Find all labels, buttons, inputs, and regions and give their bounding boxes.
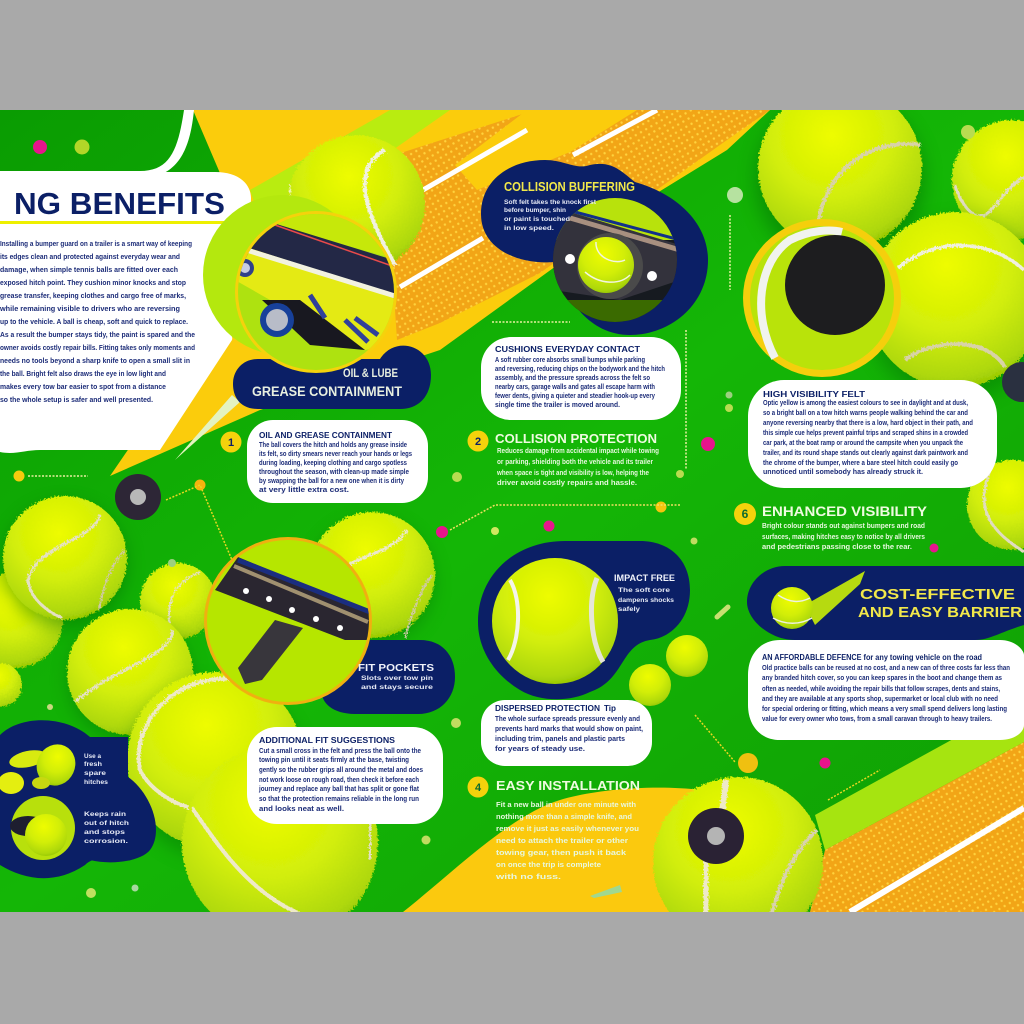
captions: Keeps rain (84, 811, 126, 818)
icon: badge 4: 4 (475, 782, 482, 794)
panel: grease text card: by swapping the ball for a new one when it is dirty (259, 476, 405, 485)
label pill (233, 346, 431, 409)
panel: grease text card (247, 420, 428, 503)
caption (618, 587, 674, 613)
heading: EASY INSTALLATION (496, 778, 640, 793)
panel: collision text card: A soft rubber core absorbs small bumps while parking (495, 355, 645, 364)
panel: visibility text card: unnoticed until somebody has already struck it. (763, 467, 923, 476)
heading: GREASE CONTAINMENT (252, 384, 403, 399)
panel: installation text card: ADDITIONAL FIT SUGGESTIONS (259, 736, 396, 745)
court graphics: bottom right band (810, 726, 1024, 912)
intro text: needs no tools beyond a sharp knife to open a small slit in (0, 356, 190, 365)
panel: visibility text card: this simple cue helps prevent painful trips and scraped shins in a crowded (763, 428, 968, 437)
panel: collision text card: nearby cars, garage walls and gates all escape harm with (495, 382, 655, 391)
captions: fresh (84, 761, 102, 768)
panel: installation text card (247, 727, 443, 824)
captions: Use a (84, 753, 101, 760)
tennis balls: top right cluster (755, 86, 1024, 552)
section: enhanced visibility (734, 503, 928, 551)
panel: grease text card: throughout the season, with clean-up made simple (259, 467, 409, 476)
lime blob backdrop (203, 195, 334, 352)
heading: AND EASY BARRIER (858, 604, 1022, 621)
panel: collision text card: fewer dents, giving a quieter and steadier hook-up every (495, 391, 656, 400)
description: remove it just as easily whenever you (496, 824, 639, 833)
caption: or paint is touched (504, 216, 570, 223)
panel: dispersion text card: Tip (604, 704, 616, 713)
panel: visibility text card: car park, at the boat ramp or around the campsite when you unpack the (763, 438, 963, 447)
panel: collision navy callout (481, 160, 708, 335)
section: collision protection (468, 430, 659, 487)
panel: grease text card: its felt, so dirty smears never reach your hands or legs (259, 449, 412, 458)
illustration: bumper with ball (553, 198, 680, 325)
intro text: so the whole setup is safer and well presented. (0, 395, 153, 404)
icon: badge 2: 2 (475, 436, 481, 448)
caption: before bumper, shin (504, 207, 566, 214)
panel: visibility text card: HIGH VISIBILITY FELT (763, 390, 865, 399)
captions: corrosion. (84, 838, 128, 845)
icon: badge 1: 1 (228, 437, 234, 449)
panel: visibility text card: the chrome of the bumper, where a bare steel hitch could easily go (763, 458, 958, 467)
illustration: tennis ball (492, 558, 618, 684)
panel: visibility text card: anyone reversing nearby that there is a low, hard object in their path, and (763, 418, 973, 427)
tennis balls: lower left cluster (0, 496, 435, 941)
panel: dispersion text card: DISPERSED PROTECTION (495, 704, 600, 713)
panel: grease containment (203, 195, 431, 409)
yellow hump (403, 788, 700, 912)
description (762, 521, 925, 551)
heading: COLLISION PROTECTION (495, 431, 657, 446)
heading (252, 368, 402, 396)
icon: grommet (688, 808, 744, 864)
icon: badge 3: 6 (742, 507, 749, 521)
icon: badge 1 (220, 432, 242, 452)
description: Bright colour stands out against bumpers and road (762, 521, 925, 530)
panel: mounting hardware callout (204, 537, 455, 714)
intro text: the ball. Bright felt also draws the eye in low light and (0, 369, 166, 378)
icon: badge 4 (468, 776, 488, 798)
panel: visibility text card: Optic yellow is among the easiest colours to see in daylight and at dusk, (763, 398, 968, 407)
captions (84, 753, 129, 845)
panel: grease text card: OIL AND GREASE CONTAINMENT (259, 431, 392, 440)
caption (504, 199, 597, 232)
intro text: makes every tow bar easier to spot from a distance (0, 382, 166, 391)
icon: badge 3 (734, 503, 756, 525)
icon: ball in circle (10, 796, 75, 860)
illustration: trailer bumper (230, 210, 405, 375)
connector lines (28, 215, 880, 800)
panel: dispersion text card: prevents hard marks that would show on paint, (495, 724, 643, 733)
description: on once the trip is complete (496, 860, 601, 869)
description: and pedestrians passing close to the rear. (762, 542, 912, 551)
intro text: while remaining visible to drivers who are reversing (0, 304, 180, 313)
heading: OIL & LUBE (343, 366, 398, 380)
icon: ball with swoosh (771, 571, 865, 629)
intro text: owner avoids costly repair bills. Fitting takes only moments and (0, 343, 195, 352)
caption: and stays secure (361, 684, 434, 691)
captions: out of hitch (84, 820, 129, 827)
caption: Soft felt takes the knock first (504, 199, 597, 206)
panel: visibility text card: trailer, and its round shape stands out clearly against dark paintwork and (763, 448, 968, 457)
panel: installation text card: journey and replace any ball that has split or gone flat (258, 784, 419, 793)
heading: ENHANCED VISIBILITY (762, 503, 928, 519)
intro text: grease transfer, keeping clothes and cargo free of marks, (0, 291, 186, 300)
panel: dispersion text card (481, 700, 652, 766)
icon: grommet right edge (1002, 362, 1024, 402)
caption: Slots over tow pin (361, 675, 433, 682)
description: nothing more than a simple knife, and (496, 812, 632, 821)
illustration: hitch bracket (204, 537, 372, 705)
panel: collision text card: CUSHIONS EVERYDAY CONTACT (495, 345, 640, 354)
panel: dispersion text card: The whole surface spreads pressure evenly and (495, 714, 640, 723)
captions: and stops (84, 829, 126, 836)
panel: installation text card: so that the protection remains reliable in the long run (259, 794, 419, 803)
panel: dispersion text card: including trim, panels and plastic parts (495, 734, 625, 743)
description (495, 800, 639, 881)
panel: collision text card (481, 337, 681, 420)
icon: badge 2 (468, 430, 488, 452)
panel: collision text card: assembly, and the pressure spreads across the felt so (495, 373, 650, 382)
tennis ball with grommet: bottom (652, 776, 824, 912)
panel: grease text card: during loading, keeping clothing and cargo spotless (259, 458, 407, 467)
heading (858, 586, 1022, 621)
heading: FIT POCKETS (358, 663, 434, 674)
panel: grease text card: The ball covers the hitch and holds any grease inside (259, 440, 407, 449)
court graphics: top diagonal band (110, 110, 770, 476)
intro text (0, 239, 195, 404)
caption: safely (618, 606, 640, 613)
caption: dampens shocks (618, 597, 674, 604)
icon: ball halves (0, 738, 82, 794)
green field (0, 110, 1024, 912)
captions: spare (84, 770, 106, 777)
panel: grease text card: at very little extra cost. (259, 485, 349, 494)
description: Fit a new ball in under one minute with (496, 800, 636, 809)
panel: installation text card: and looks neat as well. (259, 804, 344, 813)
panel: cost-effective callout (747, 566, 1024, 640)
intro text: exposed hitch point. They cushion minor knocks and stop (0, 278, 186, 287)
description: towing gear, then push it back (496, 848, 627, 857)
title: NG BENEFITS (14, 186, 225, 221)
panel: cost text card: AN AFFORDABLE DEFENCE for any towing vehicle on the road (762, 653, 982, 662)
heading: IMPACT FREE (614, 573, 675, 584)
description: driver avoid costly repairs and hassle. (497, 478, 637, 487)
intro text: up to the vehicle. A ball is cheap, soft and quick to replace. (0, 317, 188, 326)
description: or parking, shielding both the vehicle and its trailer (497, 457, 653, 466)
panel: collision text card: single time the trailer is moved around. (495, 400, 620, 409)
description (496, 446, 659, 487)
panel: installation text card: gently so the rubber grips all around the metal and does (259, 765, 423, 774)
label pill (322, 640, 455, 714)
intro text: As a result the bumper stays tidy, the paint is spared and the (0, 330, 195, 339)
description: when space is tight and visibility is low, helping the (496, 468, 649, 477)
panel: dispersion text card: for years of steady use. (495, 744, 585, 753)
panel: title and intro card (0, 110, 251, 453)
description: surfaces, making hitches easy to notice by all drivers (762, 532, 925, 541)
intro text: its edges clean and protected against everyday wear and (0, 252, 180, 261)
panel: impact callout centre (478, 541, 690, 699)
caption: The soft core (618, 587, 670, 594)
section: easy installation (468, 776, 640, 881)
heading: COLLISION BUFFERING (504, 180, 635, 194)
description: need to attach the trailer or other (496, 836, 628, 845)
panel: accessory callout bottom-left (0, 720, 156, 878)
intro text: damage, when simple tennis balls are fitted over each (0, 265, 178, 274)
intro text: Installing a bumper guard on a trailer is a smart way of keeping (0, 239, 192, 248)
tennis ball close-up with black pad (743, 219, 901, 377)
caption (361, 675, 434, 691)
panel: cost text card (748, 640, 1024, 740)
icon: grommet left (115, 474, 161, 520)
description: with no fuss. (495, 872, 561, 881)
caption: in low speed. (504, 225, 554, 232)
panel: installation text card: towing pin until it seats firmly at the base, twisting (259, 755, 409, 764)
description: Reduces damage from accidental impact while towing (497, 446, 659, 455)
tennis ball: top centre (287, 135, 425, 273)
heading: COST-EFFECTIVE (860, 586, 1015, 603)
panel: visibility text card (748, 380, 997, 488)
decorative dots (14, 125, 975, 898)
panel: visibility text card: so a bright ball on a tow hitch warns people walking behind the car and (763, 408, 968, 417)
panel: installation text card: not work loose on rough road, then check it before each (259, 775, 419, 784)
captions: hitches (84, 779, 108, 786)
panel: collision text card: and reversing, reducing chips on the bodywork and the hitch (495, 364, 665, 373)
panel: installation text card: Cut a small cross in the felt and press the ball onto the (259, 746, 421, 755)
